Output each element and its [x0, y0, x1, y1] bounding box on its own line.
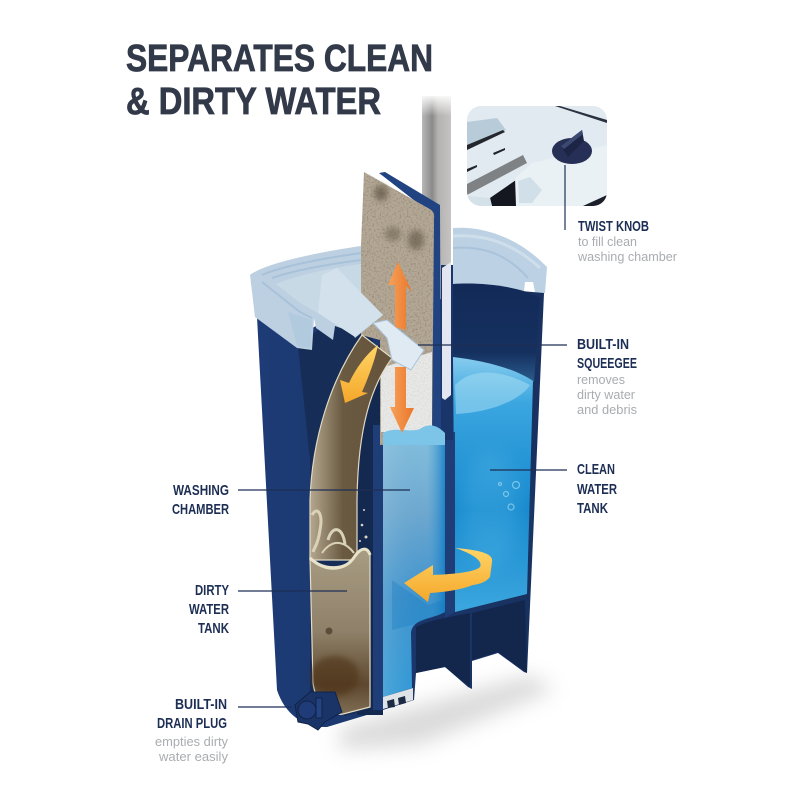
callout: clean water tank: WATER: [577, 481, 617, 498]
interior dark left panel: [298, 310, 373, 716]
inner yellow arrow: [340, 345, 378, 403]
bucket body: [257, 284, 544, 727]
callout: washing chamber: WASHING: [173, 482, 229, 499]
callout: built-in squeegee: SQUEEGEE: [577, 355, 637, 372]
callout: washing chamber: [172, 482, 410, 518]
clean tank interior: [453, 284, 540, 382]
large yellow swirl arrow: [404, 548, 492, 602]
callout: dirty water tank: TANK: [198, 620, 229, 637]
inset slots: [467, 118, 506, 147]
washing chamber water: [383, 432, 445, 697]
callout: dirty water tank: DIRTY: [195, 582, 229, 599]
callout: built-in drain plug: [155, 696, 292, 764]
callout: clean water tank: [490, 461, 617, 517]
orange arrow down: [390, 367, 414, 433]
right rim back: [453, 228, 547, 300]
bottom vents: [383, 688, 413, 709]
callout: clean water tank: TANK: [577, 500, 608, 517]
callout: twist knob: [565, 165, 677, 264]
drain plug: [295, 692, 342, 730]
callout: twist knob: washing chamber: [577, 250, 677, 264]
title: & DIRTY WATER: [126, 81, 381, 123]
foam splash: [312, 511, 354, 553]
callout: washing chamber: CHAMBER: [172, 501, 229, 518]
callout: built-in drain plug: BUILT-IN: [175, 696, 227, 713]
leg compartments: [416, 600, 527, 687]
inset: twist knob detail: [467, 106, 607, 206]
callout: built-in drain plug: empties dirty: [155, 735, 229, 749]
clean water tank: [453, 357, 533, 612]
pad wet lower section: [381, 352, 432, 432]
floor shadow: [340, 675, 555, 750]
title: SEPARATES CLEAN: [126, 38, 433, 80]
callout: twist knob: to fill clean: [578, 235, 637, 249]
callout: dirty water tank: [189, 582, 347, 637]
inset mesh strip: [467, 155, 527, 195]
callout: built-in drain plug: water easily: [158, 750, 229, 764]
callout: built-in squeegee: and debris: [577, 403, 637, 417]
dirty water channel: [310, 335, 392, 560]
washing chamber back wall: [357, 345, 383, 715]
callout: built-in squeegee: [418, 336, 637, 417]
callout: built-in squeegee: dirty water: [577, 388, 635, 402]
mop handle: [420, 94, 453, 311]
dirty water tank: [310, 509, 370, 714]
callout: built-in squeegee: BUILT-IN: [577, 336, 629, 353]
callout: built-in drain plug: DRAIN PLUG: [157, 715, 227, 732]
knob: [552, 130, 592, 164]
callout: clean water tank: CLEAN: [577, 461, 615, 478]
title: [126, 38, 433, 123]
divider wall: [373, 425, 383, 710]
bubbles: [498, 482, 520, 510]
callout: dirty water tank: WATER: [189, 601, 229, 618]
inset raised block: [515, 145, 607, 206]
squeegee: [373, 320, 424, 370]
orange arrow up: [388, 262, 412, 330]
mop pad: [361, 172, 445, 445]
central divider and mop plate: [379, 172, 455, 618]
callout: built-in squeegee: removes: [577, 373, 625, 387]
callout: twist knob: TWIST KNOB: [578, 218, 649, 235]
left rim: [250, 246, 383, 350]
